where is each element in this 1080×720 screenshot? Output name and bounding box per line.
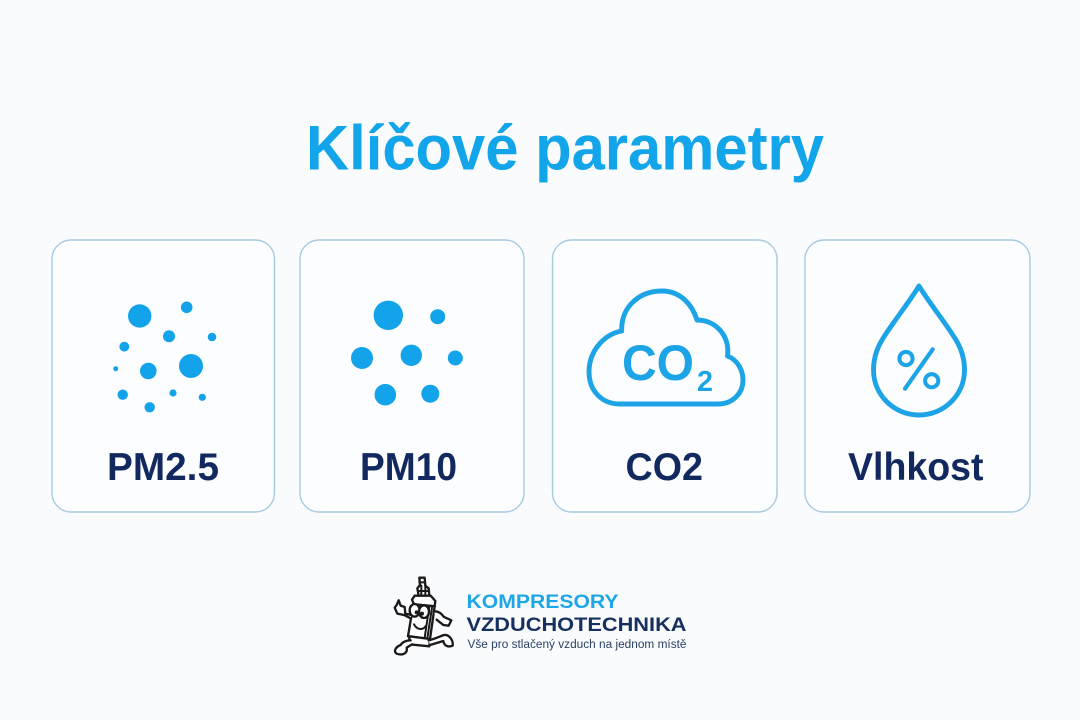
icon: compressor mascot [395,578,453,654]
panel: PM10 [300,240,524,512]
label: PM2.5: PM2.5 [107,446,219,489]
label: CO2: CO2 [626,446,703,489]
label: PM10: PM10 [360,446,457,489]
icon: CO2 cloud: CO [622,335,694,391]
title: Klíčové parametry [306,114,824,184]
logo [395,578,686,654]
brand name: KOMPRESORY: KOMPRESORY [466,591,618,613]
icon: PM2.5 particles [113,302,216,412]
icon: CO2 cloud [589,291,743,404]
panel: CO2 [552,240,777,512]
brand name: VZDUCHOTECHNIKA: VZDUCHOTECHNIKA [466,614,686,636]
panel: PM2.5 [52,240,274,512]
panel: Vlhkost [805,240,1030,512]
tagline: Vše pro stlačený vzduch na jednom místě [468,639,686,651]
icon: CO2 cloud: 2 [697,366,713,398]
label: Vlhkost: Vlhkost [848,446,984,489]
icon: humidity drop [874,286,964,415]
icon: PM10 particles [351,301,463,406]
